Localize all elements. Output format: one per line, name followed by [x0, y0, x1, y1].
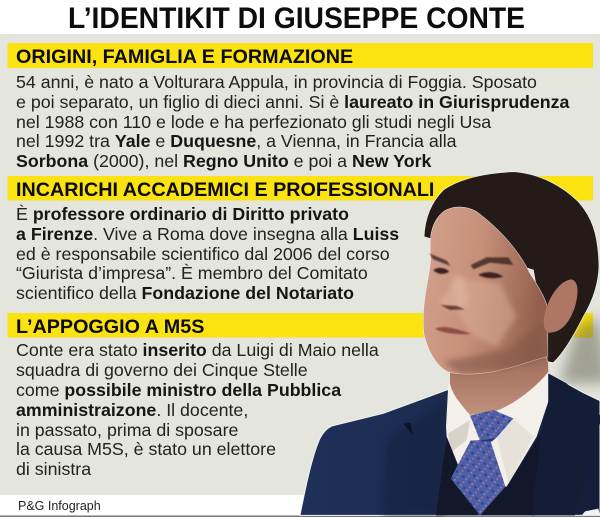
- ear: [544, 279, 578, 333]
- eyebrows: [429, 253, 451, 266]
- text block: origini: Sorbona (2000), nel Regno Unito e poi a New York: [16, 151, 431, 171]
- face: [423, 207, 548, 374]
- heading bar: incarichi: [8, 176, 593, 201]
- jaw shadow: [443, 320, 547, 374]
- text block: appoggio: come possibile ministro della Pubblica: [16, 380, 341, 400]
- text block: appoggio: amministraizone. Il docente,: [16, 400, 248, 420]
- panel: l'appoggio a M5S: [8, 313, 593, 479]
- title: L’IDENTIKIT DI GIUSEPPE CONTE: [68, 2, 525, 35]
- text block: appoggio: in passato, prima di sposare: [16, 420, 238, 440]
- tie: [451, 410, 513, 515]
- text block: origini: e poi separato, un figlio di dieci anni. Si è laureato in Giurisprudenza: [16, 92, 569, 112]
- drop shadow: [560, 317, 600, 383]
- jacket: [300, 373, 600, 515]
- mouth: [435, 327, 472, 334]
- heading bar: appoggio: [8, 313, 593, 338]
- text block: origini: nel 1988 con 110 e lode e ha perfezionato gli studi negli Usa: [16, 112, 491, 132]
- panel: origini, famiglia e formazione: [8, 43, 593, 171]
- shirt collar: [446, 370, 548, 487]
- bottom rule: [0, 516, 600, 517]
- text block: incarichi: a Firenze. Vive a Roma dove insegna alla Luiss: [16, 224, 399, 244]
- neck: [450, 327, 548, 415]
- portrait of Giuseppe Conte: [300, 172, 600, 515]
- eyes: [433, 268, 449, 274]
- heading bar: incarichi: INCARICHI ACCADEMICI E PROFESSIONALI: [16, 179, 434, 201]
- text block: origini: 54 anni, è nato a Volturara Appula, in provincia di Foggia. Sposato: [16, 72, 537, 92]
- heading bar: origini: [8, 43, 593, 68]
- pocket square: [582, 509, 600, 515]
- text block: incarichi: scientifico della Fondazione del Notariato: [16, 283, 354, 303]
- text block: appoggio: la causa M5S, è stato un elettore: [16, 439, 276, 459]
- cheek highlight: [450, 277, 517, 347]
- text block: origini: nel 1992 tra Yale e Duquesne, a Vienna, in Francia alla: [16, 131, 457, 151]
- text block: incarichi: È professore ordinario di Diritto privato: [16, 204, 349, 224]
- credit: P&G Infograph: [18, 499, 101, 513]
- hair: [424, 172, 599, 363]
- nose: [438, 273, 468, 309]
- text block: incarichi: “Giurista d’impresa”. È membro del Comitato: [16, 263, 368, 283]
- panel: incarichi accademici e professionali: [8, 176, 593, 303]
- heading bar: appoggio: L’APPOGGIO A M5S: [16, 316, 204, 338]
- vest: [436, 433, 541, 515]
- right lapel: [532, 373, 600, 515]
- text block: appoggio: di sinistra: [16, 459, 91, 479]
- text block: appoggio: squadra di governo dei Cinque Stelle: [16, 360, 308, 380]
- heading bar: origini: ORIGINI, FAMIGLIA E FORMAZIONE: [16, 46, 353, 68]
- text block: appoggio: Conte era stato inserito da Luigi di Maio nella: [16, 340, 379, 360]
- text block: incarichi: ed è responsabile scientifico dal 2006 del corso: [16, 244, 390, 264]
